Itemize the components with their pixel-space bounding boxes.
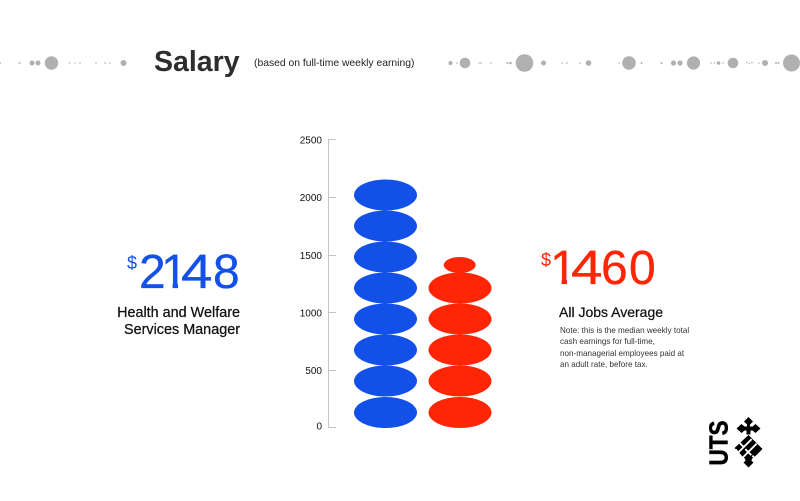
title: Salary [154,46,240,78]
axis labels: 2000 [300,193,322,204]
logo crest [734,417,762,468]
blue stack: health and welfare 2148 [354,180,417,428]
note text: cash earnings for full-time, [560,337,655,346]
axis labels: 0 [316,422,322,432]
axis [328,140,336,428]
label: health and welfare services manager: Services Manager [124,322,240,338]
axis labels: 500 [305,366,322,377]
note text [560,326,689,369]
note text: an adult rate, before tax. [560,360,648,369]
note text: Note: this is the median weekly total [560,326,689,335]
logo wordmark: UTS [704,420,734,466]
salary value: all jobs: 1 [550,242,577,295]
axis labels: 2500 [300,136,322,146]
note text: non-managerial employees paid at [560,349,684,358]
salary value: health and welfare [127,246,240,298]
salary value: health and welfare: $ [127,252,137,272]
salary value: health and welfare: 4 [180,246,212,298]
salary value: health and welfare: 2 [139,246,166,298]
axis labels: 1000 [300,308,322,320]
label: health and welfare services manager: Health and Welfare [117,305,240,321]
axis labels [300,136,322,432]
label: all jobs average: All Jobs Average [559,304,663,320]
salary value: all jobs: 0 [629,242,656,295]
salary value: all jobs [541,242,656,295]
salary value: all jobs: 4 [571,242,603,295]
salary value: health and welfare: 1 [161,246,188,298]
salary value: all jobs: $ [541,250,551,270]
salary value: all jobs: 6 [601,242,628,295]
label: health and welfare services manager [117,305,240,338]
red stack: all jobs 1460 [428,257,492,428]
salary value: health and welfare: 8 [213,246,240,298]
axis labels: 1500 [300,251,322,262]
subtitle: (based on full-time weekly earning) [254,58,414,69]
